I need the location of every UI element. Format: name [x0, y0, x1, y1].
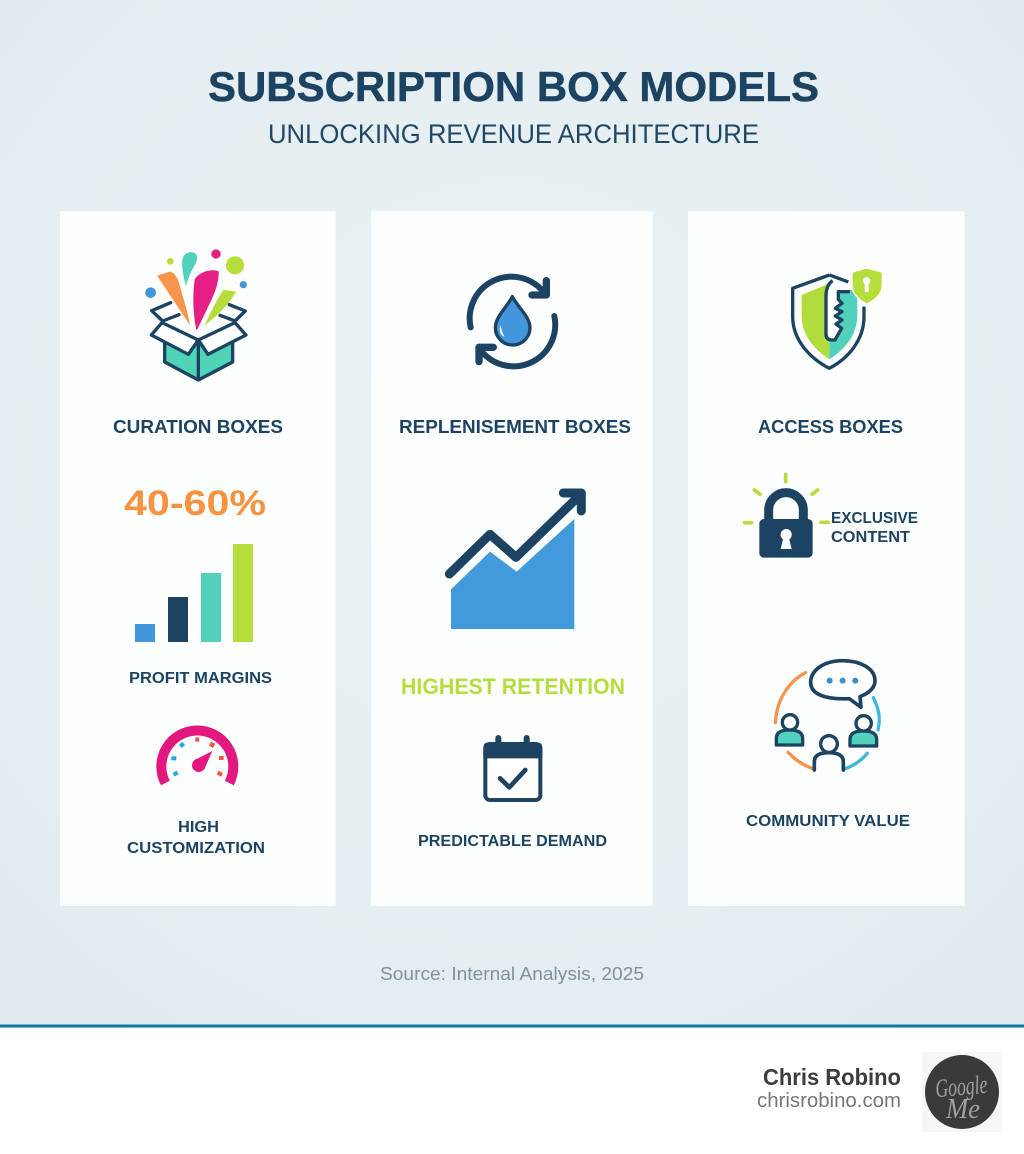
- icon: calendar: [483, 738, 542, 800]
- avatar badge: Me: [945, 1094, 980, 1125]
- label: profit margins: PROFIT MARGINS: [129, 670, 272, 687]
- avatar badge: Google: [934, 1070, 988, 1103]
- label: predictable demand: PREDICTABLE DEMAND: [418, 833, 607, 850]
- panel: access boxes: [688, 211, 964, 906]
- panel: curation boxes: [60, 211, 336, 906]
- icon: open box with confetti: [145, 249, 247, 380]
- bar chart: margins: [135, 544, 253, 642]
- subtitle: UNLOCKING REVENUE ARCHITECTURE: [268, 119, 759, 149]
- panel: replenishment boxes: [371, 211, 652, 906]
- author website: chrisrobino.com: [757, 1090, 901, 1112]
- heading: replenishment boxes: REPLENISEMENT BOXES: [399, 417, 631, 437]
- label: community value: COMMUNITY VALUE: [746, 813, 910, 830]
- title: SUBSCRIPTION BOX MODELS: [208, 63, 819, 110]
- label: high customization: HIGH: [178, 819, 219, 836]
- stat: margin range: 40-60%: [124, 484, 266, 523]
- icon: community circle: [775, 661, 879, 770]
- stat: highest retention: HIGHEST RETENTION: [401, 674, 625, 699]
- label: high customization: [127, 819, 265, 857]
- label: exclusive content: EXCLUSIVE: [831, 510, 918, 527]
- label: exclusive content: [831, 510, 918, 546]
- heading: access boxes: ACCESS BOXES: [758, 417, 903, 437]
- footer: [0, 1024, 1024, 1154]
- label: high customization: CUSTOMIZATION: [127, 840, 265, 857]
- chart: rising area: [449, 493, 581, 629]
- avatar badge: [922, 1052, 1002, 1132]
- icon: shield with key: [793, 269, 882, 368]
- icon: water drop cycle: [470, 277, 555, 366]
- label: exclusive content: CONTENT: [831, 529, 910, 546]
- heading: curation boxes: CURATION BOXES: [113, 417, 283, 437]
- icon: padlock with rays: [745, 474, 828, 558]
- source note: Source: Internal Analysis, 2025: [380, 964, 644, 984]
- author name: Chris Robino: [763, 1064, 901, 1090]
- icon: gauge: [161, 731, 233, 783]
